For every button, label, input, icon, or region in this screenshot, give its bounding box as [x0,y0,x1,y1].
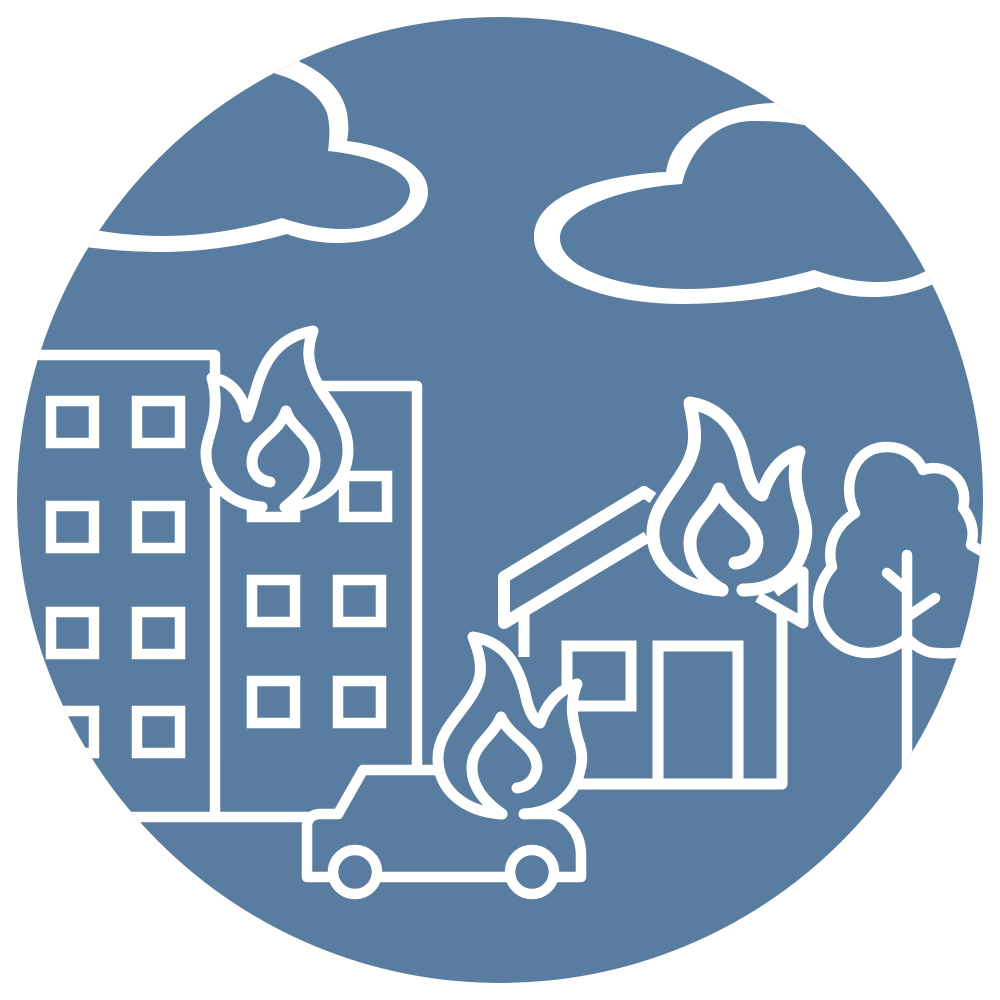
door [658,646,738,784]
roof [504,492,653,623]
window [567,646,631,706]
house [504,492,803,784]
car [307,770,581,894]
building flame [206,331,348,507]
right cloud [534,100,940,304]
gable end [758,572,803,623]
front wheel [510,850,554,894]
car body [307,770,581,877]
left apartment building [30,355,312,817]
tree [818,447,990,790]
left cloud [80,50,428,252]
windows of left building [51,401,180,753]
right apartment building [252,386,417,770]
windows of right building [252,476,387,723]
car flame [438,637,582,814]
walls [524,610,782,784]
rear wheel [333,850,377,894]
house flame [653,403,806,590]
